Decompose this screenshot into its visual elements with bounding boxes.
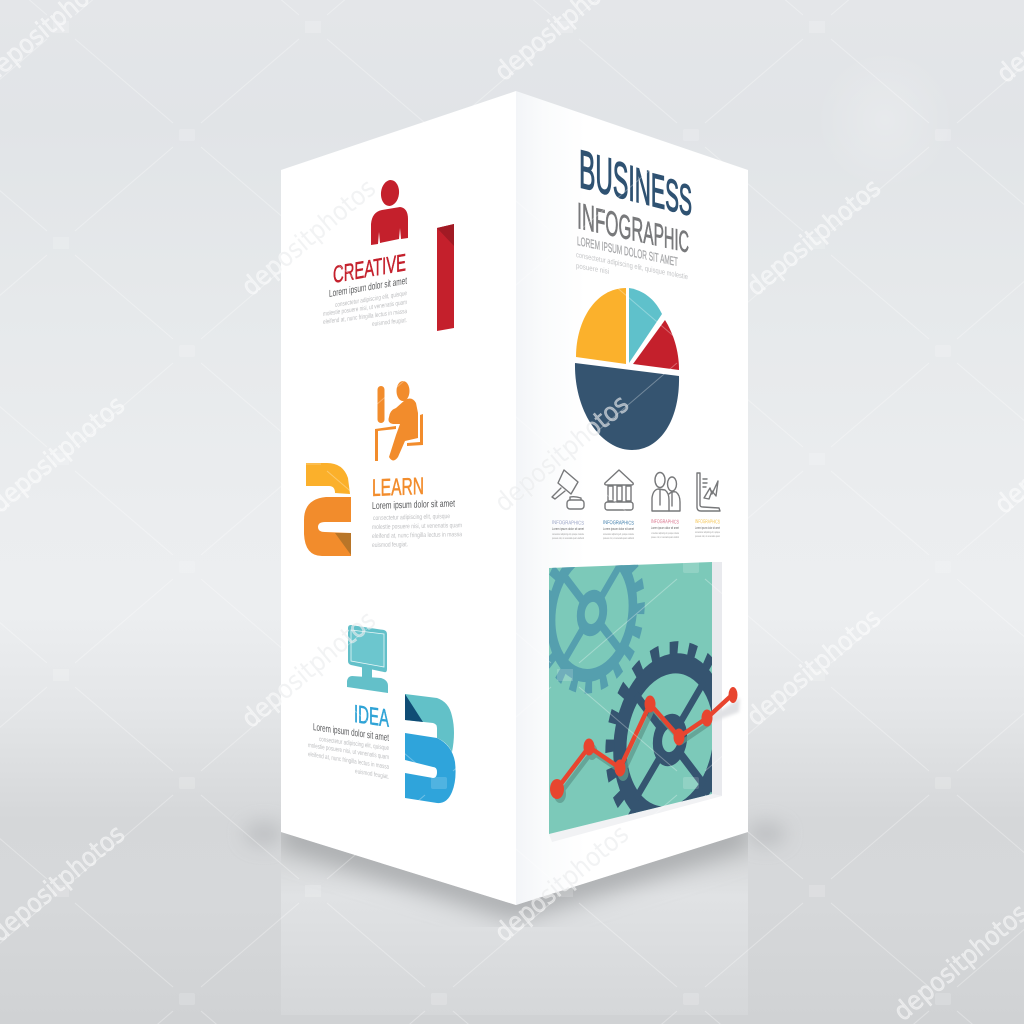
icon: person at desk [375,381,423,461]
slice: navy [575,363,679,450]
text block: idea: molestie posuere nisi, ut venenatis quam [308,742,389,761]
label: column 1: Lorem ipsum dolor sit amet [552,527,584,531]
label: column 2 [603,520,634,540]
label: column 3: posuere nisi, ut venenatis quam eleifend [651,535,679,539]
label: column 2: INFOGRAPHICS [603,520,634,527]
label: column 3: Lorem ipsum dolor sit amet [651,526,679,530]
heading: learn: LEARN [372,473,424,502]
text block: creative: euismod feugiat. [372,317,407,328]
text block: learn [372,499,462,549]
label: column 4 [695,519,720,538]
text block: idea: euismod feugiat. [355,768,389,781]
watermark: depositphotos [489,389,635,518]
label: column 1: consectetur adipiscing elit, quisque molestie [552,532,584,536]
number 3 [405,694,456,803]
icon row [552,470,720,540]
label: column 4: INFOGRAPHICS [695,519,720,526]
heading: business: BUSINESS [579,138,692,228]
watermark: depositphotos [236,173,382,302]
line chart [550,687,740,803]
icon: gavel [552,470,584,509]
label: column 3 [651,519,679,539]
label: column 4: posuere nisi, ut venenatis quam [695,534,720,538]
slice: teal [629,288,662,363]
slice: yellow [576,288,626,364]
label: column 1: INFOGRAPHICS [552,520,584,527]
floor reflection and shadow [246,820,785,935]
number 1 [437,224,454,331]
label: column 3: INFOGRAPHICS [651,519,679,526]
icon: light gear [549,564,645,694]
step 1: creative [323,179,454,331]
icon: person [371,179,408,245]
label: column 2: posuere nisi, ut venenatis quam eleifend [603,536,634,540]
text block: learn: Lorem ipsum dolor sit amet [372,499,455,512]
text block: idea: Lorem ipsum dolor sit amet [313,722,389,744]
pie chart [575,288,679,450]
title block [576,138,692,281]
icon: growth chart [697,473,720,511]
watermark: depositphotos [741,173,887,302]
text block: idea [308,722,389,781]
text block: creative: consectetur adipiscing elit, quisque [335,290,407,309]
label: column 1: posuere nisi, ut venenatis quam eleifend [552,536,584,540]
watermark: depositphotos [236,605,382,734]
step 2: learn [304,381,462,556]
text block: learn: consectetur adipiscing elit, quisque [373,513,450,522]
text block: intro: posuere nisi [576,261,609,276]
number 2 [304,463,351,556]
text block: intro [576,250,688,281]
text block: idea: eleifend at, nunc fringilla lectus in massa [308,751,389,771]
label: column 1 [552,520,584,540]
heading: infographic: INFOGRAPHIC [577,194,689,261]
watermark: depositphotos [236,173,382,302]
icon: bank [605,470,633,510]
step 3: idea [308,625,456,803]
watermark: depositphotos [741,603,887,732]
right face [516,91,748,905]
text block: learn: eleifend at, nunc fringilla lectus in massa [372,531,462,540]
label: column 2: consectetur adipiscing elit, quisque molestie [603,532,634,536]
text block: learn: euismod feugiat. [372,541,408,549]
text block: intro: consectetur adipiscing elit, quisque molestie [576,250,688,281]
watermark: depositphotos [489,819,635,948]
icon: dark gear [605,641,712,815]
text block: learn: molestie posuere nisi, ut venenatis quam [372,522,462,531]
slice: red [633,320,679,370]
panel: gears and line chart [549,562,740,842]
text block: creative [323,276,407,328]
watermark: depositphotos [489,389,635,518]
panel recess shadow [549,562,722,842]
text block: creative: eleifend at, nunc fringilla lectus in massa [323,308,407,326]
label: column 4: consectetur adipiscing elit, quisque [695,530,720,534]
label: column 4: Lorem ipsum dolor sit amet [695,526,720,530]
text block: idea: consectetur adipiscing elit, quisque [319,736,389,752]
icon: business people [652,472,680,511]
watermark: depositphotos [489,819,635,948]
left face [281,91,516,905]
heading: idea: IDEA [354,700,389,733]
watermark: depositphotos [236,605,382,734]
icon: monitor [347,625,388,693]
label: column 2: Lorem ipsum dolor sit amet [603,527,634,531]
subheading: LOREM IPSUM DOLOR SIT AMET [577,234,678,269]
text block: creative: Lorem ipsum dolor sit amet [329,276,407,300]
3D folded box [281,91,748,905]
heading: creative: CREATIVE [333,249,406,289]
text block: creative: molestie posuere nisi, ut venenatis quam [323,299,407,318]
icon row: consectetur adipiscing elit, quisque molestie [651,531,679,535]
panel background [549,562,712,834]
